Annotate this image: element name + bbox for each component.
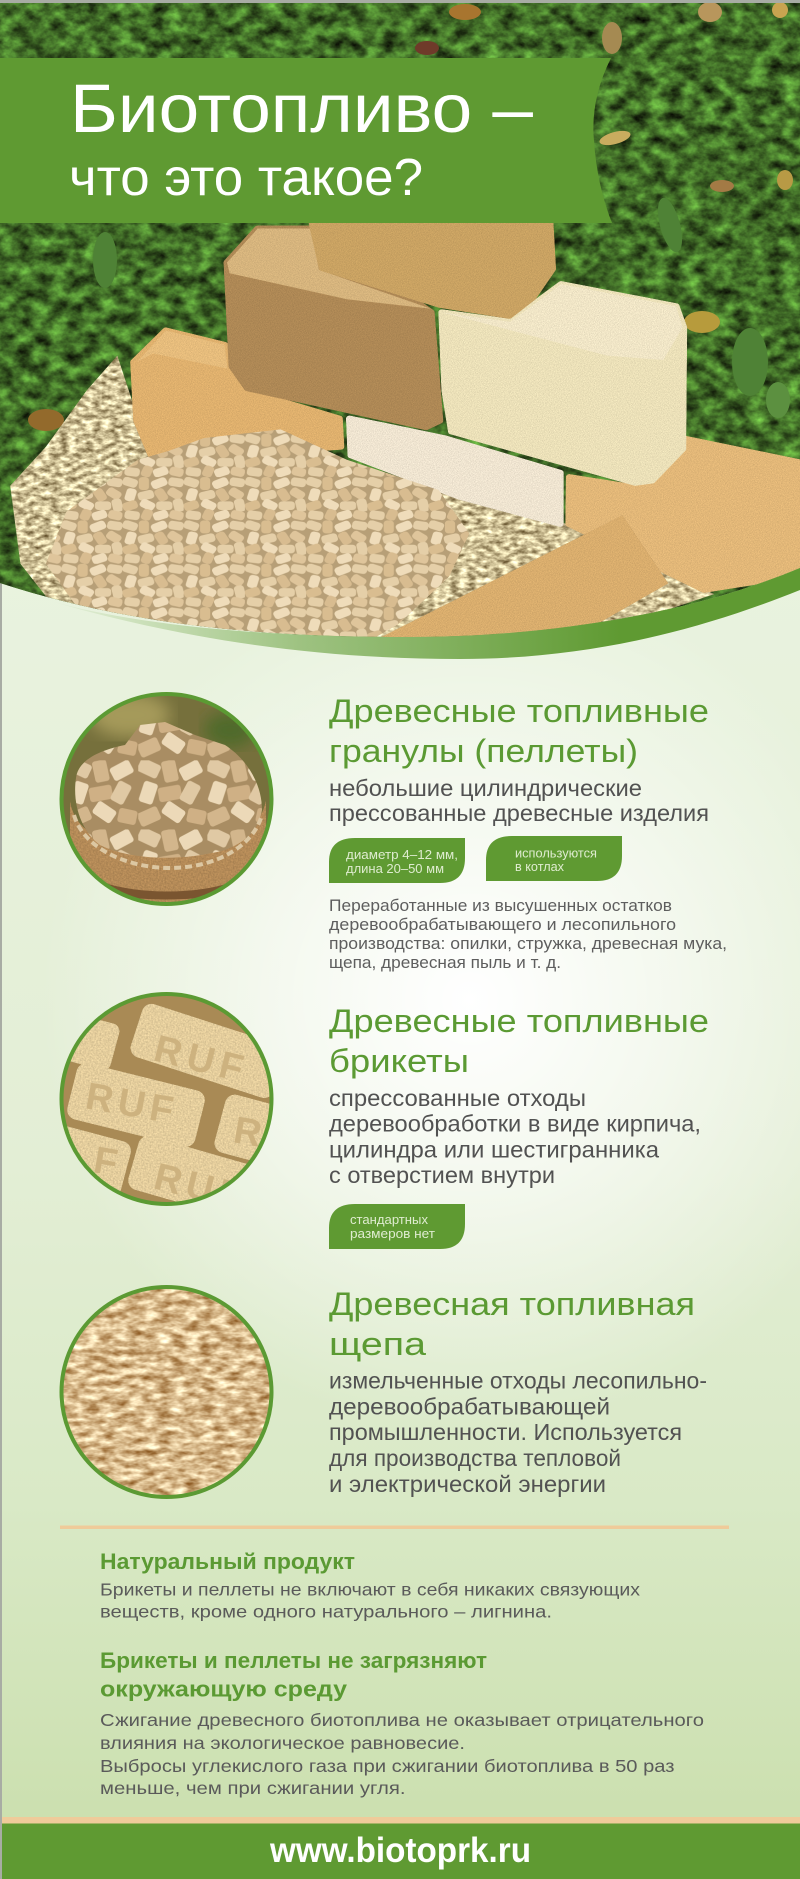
- section text: меньше, чем при сжигании угля.: [100, 1778, 406, 1798]
- top grey edge: [0, 0, 800, 3]
- rolled briquette front: [380, 515, 668, 642]
- briquette: brown middle: [227, 229, 440, 427]
- subtitle: wood chips: и электрической энергии: [329, 1471, 606, 1497]
- tag: pellet usage: используются: [515, 846, 597, 860]
- circle photo: RUF briquettes: F: [90, 1140, 121, 1185]
- text: pellet description: производства: опилки, стружка, древесная мука,: [329, 935, 727, 953]
- subtitle: briquettes: с отверстием внутри: [329, 1162, 555, 1188]
- section heading: Брикеты и пеллеты не загрязняют: [100, 1648, 487, 1673]
- section text: Сжигание древесного биотоплива не оказывает отрицательного: [100, 1710, 704, 1730]
- tag: pellet size: [329, 838, 465, 883]
- text: pellet description: Переработанные из высушенных остатков: [329, 897, 672, 915]
- heading: pellets: [329, 693, 709, 769]
- text: pellet description: деревообрабатывающего и лесопильного: [329, 916, 676, 934]
- section heading: Натуральный продукт: [100, 1549, 355, 1574]
- briquette: right orange: [569, 439, 800, 590]
- section heading: окружающую среду: [100, 1676, 348, 1702]
- heading: pellets: гранулы (пеллеты): [329, 733, 638, 769]
- briquette: white bottom: [349, 419, 560, 524]
- circle photo: pellets in basket: [60, 690, 274, 910]
- circle photo: RUF briquettes: [60, 992, 274, 1206]
- subtitle: pellets: [329, 775, 709, 826]
- wood shavings: [10, 356, 714, 642]
- heading: wood chips: щепа: [329, 1326, 426, 1362]
- section text: [100, 1580, 640, 1622]
- heading: briquettes: брикеты: [329, 1043, 469, 1079]
- text: pellet description: [329, 897, 727, 972]
- section text: влияния на экологическое равновесие.: [100, 1733, 465, 1753]
- footer: [2, 1817, 800, 1879]
- fallen leaves and grass accents: [28, 2, 793, 431]
- heading: pellets: Древесные топливные: [329, 693, 709, 729]
- subtitle: wood chips: измельченные отходы лесопильно-: [329, 1368, 707, 1394]
- title line 1: Биотопливо –: [70, 70, 534, 147]
- section text: [100, 1710, 704, 1798]
- subtitle: wood chips: деревообрабатывающей: [329, 1394, 610, 1420]
- briquette: cream: [442, 284, 684, 483]
- section heading: [100, 1648, 487, 1702]
- tag: briquette sizes: размеров нет: [350, 1226, 435, 1241]
- circle photo: wood chips: [60, 1285, 274, 1500]
- subtitle: briquettes: деревообработки в виде кирпича,: [329, 1110, 701, 1136]
- tag: pellet usage: [486, 836, 622, 881]
- section text: Выбросы углекислого газа при сжигании биотоплива в 50 раз: [100, 1756, 674, 1776]
- heading: wood chips: [329, 1286, 695, 1362]
- subtitle: wood chips: [329, 1368, 707, 1497]
- briquette: top tan: [312, 223, 553, 316]
- circle photo: RUF briquettes: RUF: [150, 1028, 253, 1092]
- title banner: [0, 58, 612, 223]
- circle photo: RUF briquettes: RUF: [150, 1156, 250, 1219]
- pellets heap: [46, 429, 469, 642]
- heading: briquettes: Древесные топливные: [329, 1003, 709, 1039]
- tag: briquette sizes: [329, 1204, 465, 1249]
- subtitle: wood chips: промышленности. Используется: [329, 1419, 682, 1445]
- heading: wood chips: Древесная топливная: [329, 1286, 695, 1322]
- section text: Брикеты и пеллеты не включают в себя никаких связующих: [100, 1580, 640, 1600]
- subtitle: briquettes: цилиндра или шестигранника: [329, 1136, 659, 1162]
- section text: веществ, кроме одного натурального – лигнина.: [100, 1602, 552, 1622]
- photo: biofuel briquettes and pellets on grass: [0, 0, 800, 680]
- subtitle: wood chips: для производства тепловой: [329, 1445, 621, 1471]
- heading: briquettes: [329, 1003, 709, 1079]
- subtitle: briquettes: [329, 1085, 701, 1188]
- section: natural product: [100, 1549, 640, 1622]
- circle photo: RUF briquettes: R: [230, 1110, 265, 1156]
- tag: pellet size: диаметр 4–12 мм,: [346, 847, 458, 862]
- briquette: left orange: [134, 330, 341, 460]
- website address: www.biotoprk.ru: [269, 1831, 531, 1870]
- text: pellet description: щепа, древесная пыль и т. д.: [329, 954, 561, 972]
- subtitle: pellets: прессованные древесные изделия: [329, 800, 709, 826]
- circle photo: RUF briquettes: RUF: [82, 1076, 181, 1133]
- green swoosh under the photo: [40, 568, 800, 659]
- subtitle: pellets: небольшие цилиндрические: [329, 775, 642, 801]
- briquettes stack: [134, 223, 800, 590]
- tag: briquette sizes: стандартных: [350, 1212, 428, 1227]
- tag: pellet size: длина 20–50 мм: [346, 861, 444, 876]
- tag: pellet usage: в котлах: [515, 859, 564, 874]
- section: environment: [100, 1648, 704, 1798]
- subtitle: briquettes: спрессованные отходы: [329, 1085, 586, 1111]
- title line 2: что это такое?: [69, 149, 423, 207]
